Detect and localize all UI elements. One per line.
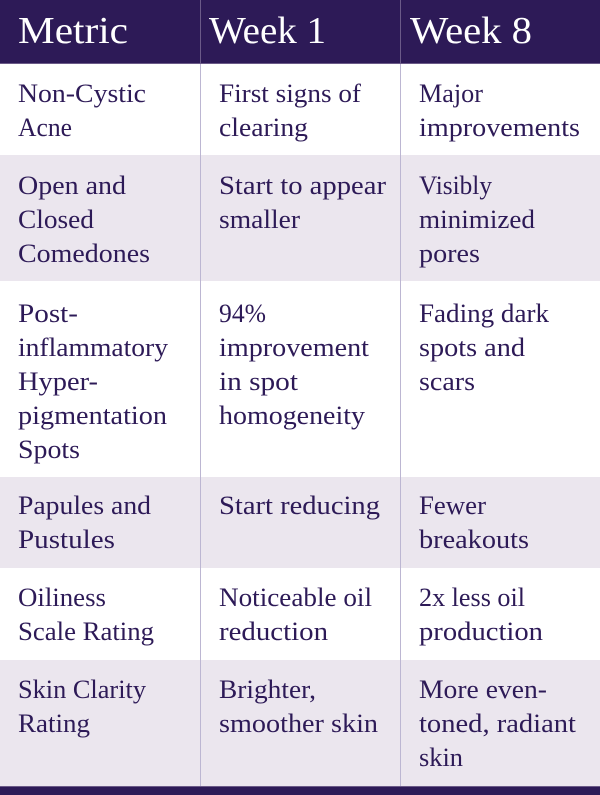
header row <box>0 0 600 64</box>
row: Post-inflammatory Hyperpigmentation Spots: in spot <box>219 367 299 396</box>
header row: Week 8 <box>410 10 532 52</box>
header row: Week 1 <box>209 10 326 52</box>
row: Open and Closed Comedones: Start to appear <box>219 171 386 200</box>
row: Oiliness Scale Rating: reduction <box>219 617 328 646</box>
row: Papules and Pustules: Pustules <box>18 525 115 554</box>
row: Post-inflammatory Hyperpigmentation Spots: Post- <box>18 299 78 328</box>
row: Open and Closed Comedones: pores <box>419 239 480 268</box>
row: Papules and Pustules: Papules and <box>18 491 151 520</box>
row: Non-Cystic Acne: clearing <box>219 113 308 142</box>
row: Open and Closed Comedones: Comedones <box>18 239 150 268</box>
row: Open and Closed Comedones: smaller <box>219 205 300 234</box>
row: Post-inflammatory Hyperpigmentation Spots: scars <box>419 367 475 396</box>
row: Open and Closed Comedones: Closed <box>18 205 94 234</box>
row: Non-Cystic Acne: improvements <box>419 113 580 142</box>
row: Papules and Pustules: Fewer <box>419 491 486 520</box>
header row: Metric <box>18 10 128 52</box>
row: Oiliness Scale Rating: production <box>419 617 543 646</box>
row: Post-inflammatory Hyperpigmentation Spots: pigmentation <box>18 401 167 430</box>
row: Open and Closed Comedones <box>18 171 535 268</box>
row: Non-Cystic Acne: Acne <box>18 113 72 142</box>
row: Oiliness Scale Rating <box>18 583 543 646</box>
row: Oiliness Scale Rating: Noticeable oil <box>219 583 372 612</box>
row: Post-inflammatory Hyperpigmentation Spots: Spots <box>18 435 80 464</box>
row: Oiliness Scale Rating: Scale Rating <box>18 617 154 646</box>
row: Skin Clarity Rating: Rating <box>18 709 90 738</box>
row: Skin Clarity Rating: skin <box>419 743 463 772</box>
row: Papules and Pustules: breakouts <box>419 525 529 554</box>
row: Post-inflammatory Hyperpigmentation Spots: spots and <box>419 333 525 362</box>
row: Post-inflammatory Hyperpigmentation Spots: Fading dark <box>419 299 549 328</box>
row: Oiliness Scale Rating: 2x less oil <box>419 583 525 612</box>
row: Open and Closed Comedones: minimized <box>419 205 535 234</box>
row: Non-Cystic Acne <box>18 79 580 142</box>
row: Papules and Pustules <box>18 491 529 554</box>
row: Post-inflammatory Hyperpigmentation Spots: Hyper- <box>18 367 98 396</box>
footer bar <box>0 786 600 795</box>
row: Non-Cystic Acne: Non-Cystic <box>18 79 146 108</box>
row: Non-Cystic Acne: First signs of <box>219 79 361 108</box>
row: Open and Closed Comedones: Visibly <box>419 171 492 200</box>
row: Post-inflammatory Hyperpigmentation Spots: improvement <box>219 333 370 362</box>
row: Skin Clarity Rating: Brighter, <box>219 675 316 704</box>
row: Skin Clarity Rating: smoother skin <box>219 709 378 738</box>
row: Non-Cystic Acne: Major <box>419 79 483 108</box>
row: Skin Clarity Rating: More even- <box>419 675 547 704</box>
row: Post-inflammatory Hyperpigmentation Spots: homogeneity <box>219 401 365 430</box>
row: Skin Clarity Rating <box>18 675 577 772</box>
row: Oiliness Scale Rating: Oiliness <box>18 583 106 612</box>
row: Post-inflammatory Hyperpigmentation Spots: 94% <box>219 299 266 328</box>
row: Papules and Pustules: Start reducing <box>219 491 380 520</box>
row: Post-inflammatory Hyperpigmentation Spots <box>18 299 549 464</box>
row: Skin Clarity Rating: Skin Clarity <box>18 675 146 704</box>
row: Open and Closed Comedones: Open and <box>18 171 126 200</box>
row: Post-inflammatory Hyperpigmentation Spots: inflammatory <box>18 333 168 362</box>
row: Skin Clarity Rating: toned, radiant <box>419 709 577 738</box>
